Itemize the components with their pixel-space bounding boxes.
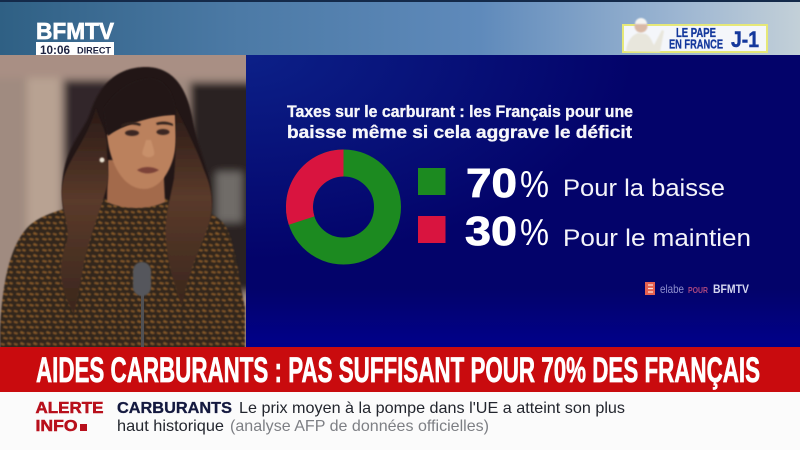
legend: pour la baisse: % bbox=[520, 164, 549, 205]
legend: pour le maintien: Pour le maintien bbox=[563, 225, 751, 252]
heading: baisse même si cela aggrave le déficit bbox=[287, 122, 632, 142]
alerte info label: ALERTE bbox=[36, 400, 104, 417]
ticker bbox=[0, 392, 800, 450]
source: elabe pour BFMTV bbox=[645, 282, 749, 296]
source: elabe pour BFMTV: elabe bbox=[660, 282, 684, 296]
panel: poll graphic bbox=[246, 55, 800, 347]
source: elabe pour BFMTV: POUR bbox=[688, 285, 708, 295]
legend: pour le maintien: % bbox=[520, 212, 549, 253]
presenter neck bbox=[107, 160, 165, 208]
badge: le pape en France J-1: J-1 bbox=[731, 27, 759, 52]
presenter features bbox=[100, 122, 173, 173]
video: presenter bbox=[0, 55, 246, 347]
legend: pour la baisse bbox=[418, 160, 725, 206]
legend: pour la baisse: 70 bbox=[466, 160, 517, 206]
BFMTV logo and clock: 10:06 bbox=[40, 45, 70, 57]
badge: le pape en France J-1: LE PAPE bbox=[676, 25, 716, 40]
BFMTV logo and clock bbox=[36, 18, 114, 57]
badge: le pape en France J-1 bbox=[623, 18, 767, 52]
top banner bbox=[0, 0, 800, 55]
presenter top bbox=[0, 198, 246, 347]
ticker text: (analyse AFP de données officielles) bbox=[230, 418, 489, 435]
presenter hair back bbox=[61, 66, 212, 210]
BFMTV logo and clock: DIRECT bbox=[77, 46, 112, 56]
legend: pour le maintien bbox=[418, 208, 751, 254]
BFMTV logo and clock: BFMTV bbox=[36, 18, 114, 44]
microphone bbox=[133, 262, 151, 350]
icon: pope figure bbox=[626, 18, 664, 52]
ticker text: CARBURANTS bbox=[117, 400, 232, 417]
presenter face bbox=[107, 115, 176, 189]
ticker text: haut historique bbox=[117, 418, 224, 435]
alerte info label: INFO bbox=[36, 418, 78, 435]
source: elabe pour BFMTV: BFMTV bbox=[713, 284, 749, 296]
badge: le pape en France J-1: EN FRANCE bbox=[669, 36, 723, 52]
ticker text: Le prix moyen à la pompe dans l'UE a atteint son plus bbox=[239, 400, 625, 417]
ticker text bbox=[117, 400, 625, 435]
legend: pour le maintien: 30 bbox=[465, 208, 517, 254]
heading bbox=[287, 103, 633, 142]
legend: pour la baisse: Pour la baisse bbox=[563, 175, 725, 202]
presenter hair locks bbox=[60, 112, 212, 312]
heading: Taxes sur le carburant : les Français pour une bbox=[287, 103, 633, 121]
donut chart bbox=[299, 163, 388, 251]
video background bbox=[0, 55, 246, 347]
alerte info label bbox=[36, 400, 104, 435]
